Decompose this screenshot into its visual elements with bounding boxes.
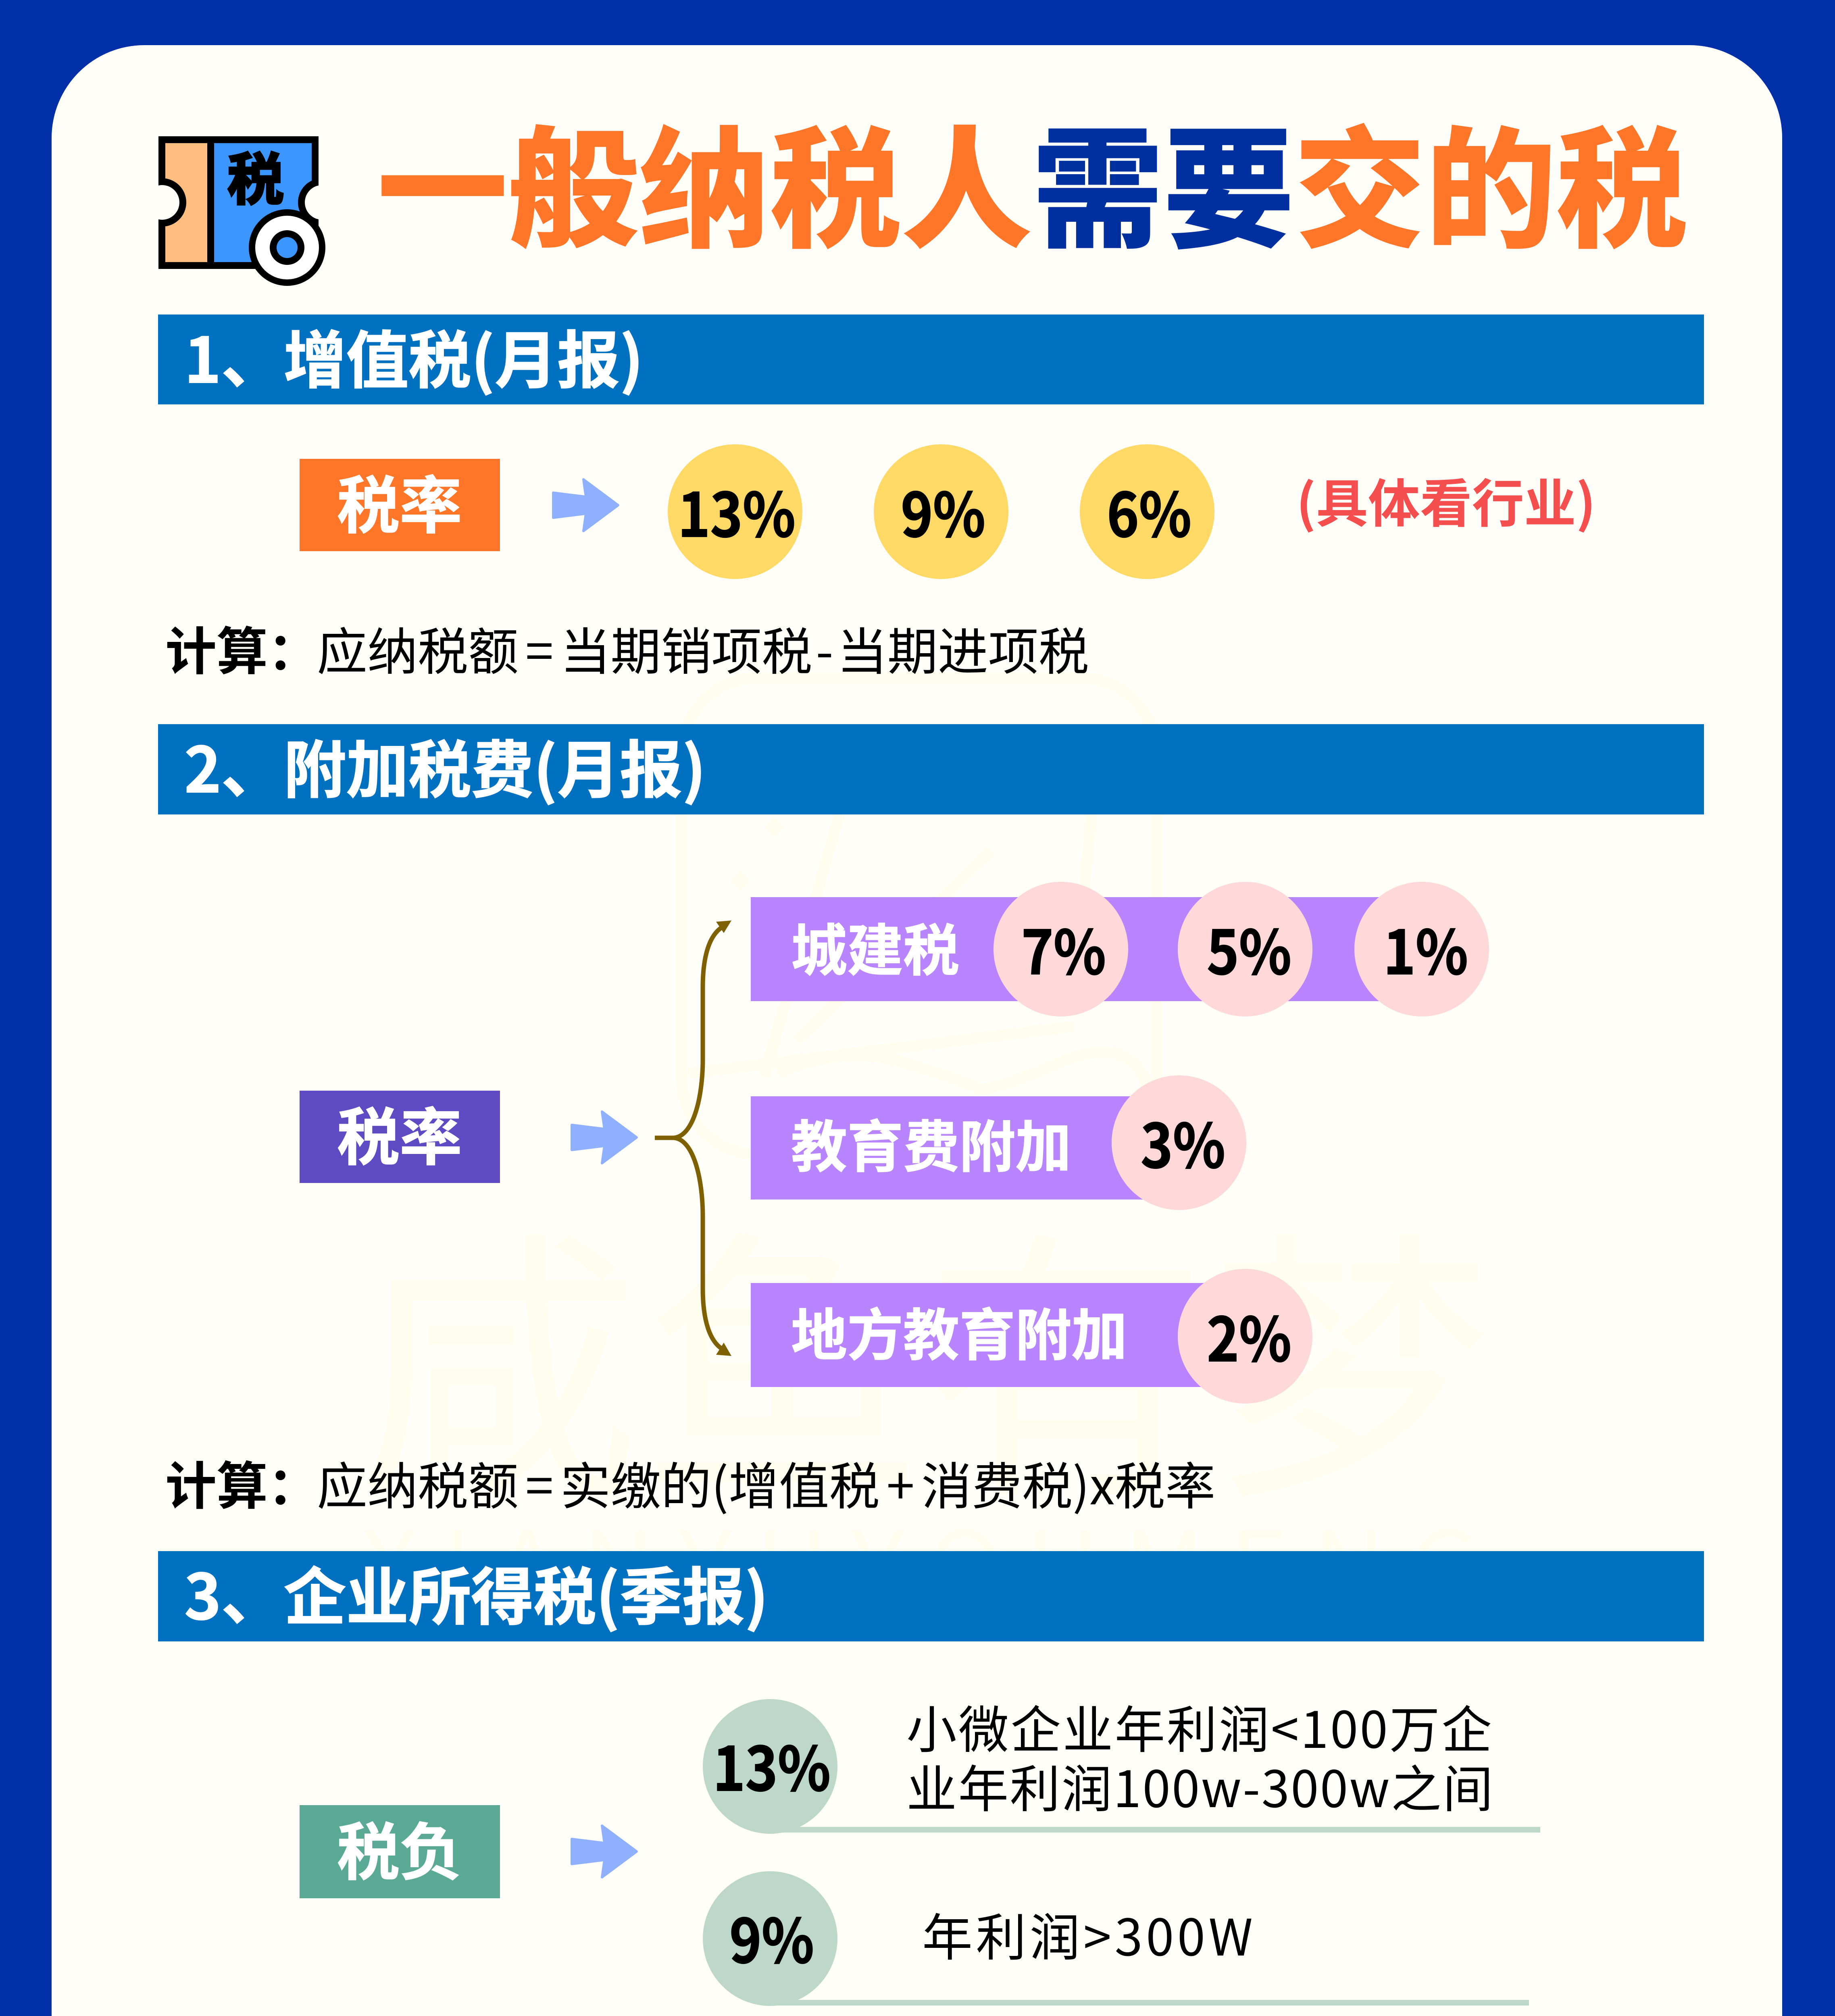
title: 一般纳税人需要交的税 <box>377 85 1687 275</box>
icon: tax ticket <box>158 136 325 286</box>
section 2 rate label: 税率 <box>337 1087 462 1178</box>
arrow 3 <box>572 1826 637 1877</box>
watermark <box>356 678 1493 1633</box>
rate circle 13% <box>668 444 802 579</box>
calculation 2: 应纳税额 <box>317 1446 519 1519</box>
row: city tax: 城建税 <box>791 906 959 987</box>
brace top arrowhead <box>716 921 731 933</box>
calculation 2: 计算： <box>165 1445 319 1519</box>
section 2 heading <box>158 720 1704 814</box>
section 2 rate label <box>300 1087 500 1183</box>
row: city tax: 1% <box>1383 904 1468 992</box>
arrow 1 <box>553 479 618 531</box>
note: by industry: (具体看行业) <box>1296 462 1596 537</box>
row: education surcharge: 教育费附加 <box>791 1102 1071 1183</box>
rate circle 9% <box>874 444 1008 579</box>
calculation 1: 应纳税额 <box>317 611 519 684</box>
item: 13% <box>703 1689 1540 1834</box>
item: 13%: 13% <box>713 1721 831 1808</box>
rate circle 9%: 9% <box>901 467 985 554</box>
item: 9% <box>703 1871 1529 2006</box>
section 3 burden label: 税负 <box>337 1802 462 1893</box>
row: city tax <box>751 882 1489 1016</box>
calculation 2: =实缴的(增值税+消费税)x税率 <box>525 1446 1215 1519</box>
row: local education surcharge <box>751 1269 1312 1404</box>
row: education surcharge: 3% <box>1141 1098 1225 1185</box>
brace <box>655 921 731 1356</box>
rate circle 6% <box>1080 444 1214 579</box>
calculation 1: =当期销项税-当期进项税 <box>525 611 1089 684</box>
row: city tax: 7% <box>1021 904 1106 992</box>
watermark: 咸鱼有梦 <box>356 1143 1493 1555</box>
row: city tax: 5% <box>1207 904 1291 992</box>
item: 9%: 年利润>300W <box>922 1897 1253 1970</box>
item: 9%: 9% <box>729 1893 814 1981</box>
arrow 2 <box>572 1112 637 1163</box>
row: education surcharge <box>751 1075 1246 1210</box>
rate circle 6%: 6% <box>1107 467 1191 554</box>
calculation 1: 计算： <box>165 610 319 685</box>
section 3 heading <box>158 1547 1704 1641</box>
item: 13%: 业年利润100w-300w之间 <box>906 1749 1493 1822</box>
section 1 rate label <box>300 455 500 551</box>
item: 13%: 小微企业年利润<100万企 <box>906 1689 1492 1762</box>
section 1 heading: 1、增值税(月报) <box>184 310 644 401</box>
watermark: XIANYUYOUMENG <box>360 1487 1480 1633</box>
section 1 rate label: 税率 <box>337 455 462 546</box>
section 3 heading: 3、企业所得税(季报) <box>184 1547 769 1637</box>
section 2 heading: 2、附加税费(月报) <box>184 720 706 810</box>
row: local education surcharge: 地方教育附加 <box>791 1291 1127 1372</box>
icon glyph: 税 <box>227 135 284 216</box>
rate circle 13%: 13% <box>678 467 796 554</box>
row: local education surcharge: 2% <box>1207 1291 1291 1379</box>
section 3 burden label <box>300 1802 500 1898</box>
section 1 heading <box>158 310 1704 404</box>
brace bottom arrowhead <box>716 1343 731 1356</box>
